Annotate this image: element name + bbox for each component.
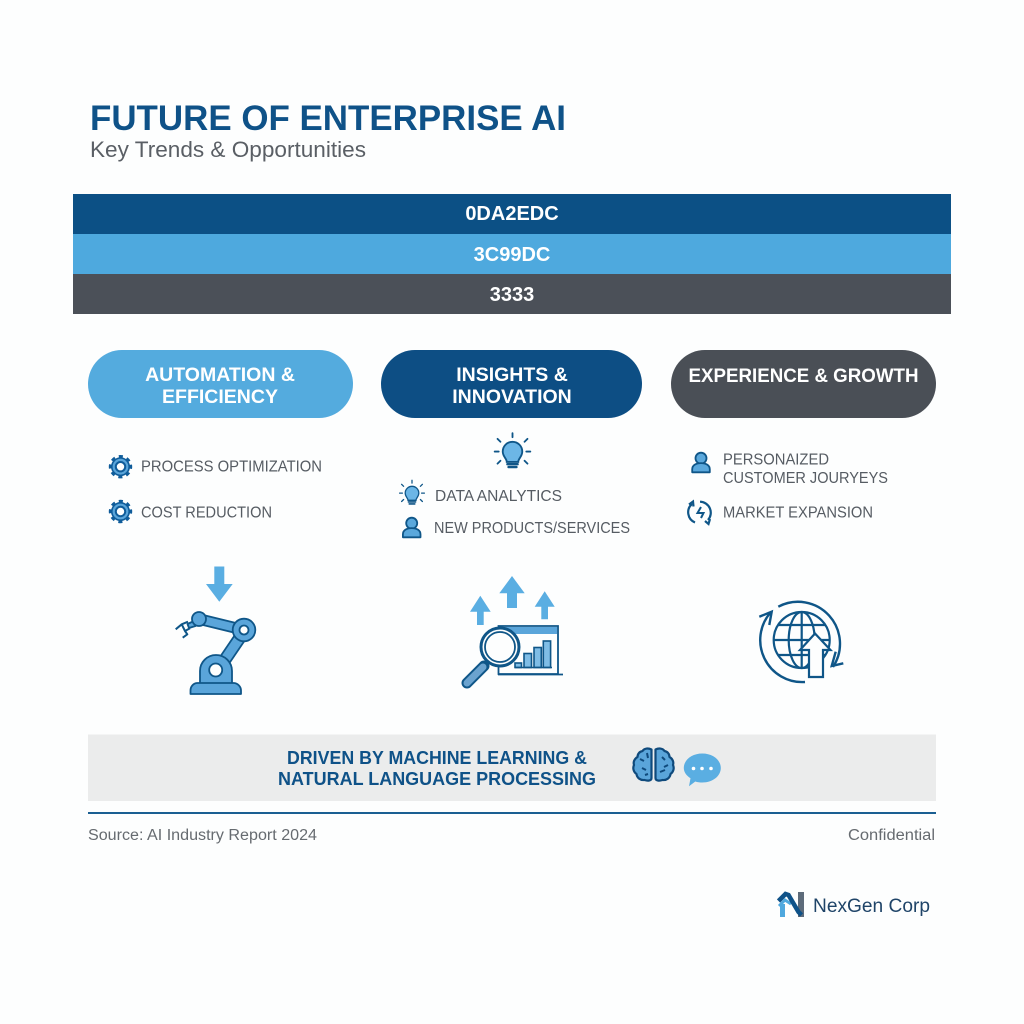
list item: process optimization	[108, 455, 322, 479]
pill heading: insights: INNOVATION	[452, 386, 572, 408]
icon: down arrow	[206, 566, 233, 602]
pill heading: automation: EFFICIENCY	[162, 386, 278, 408]
list item: personalized journeys	[692, 452, 888, 487]
band: 3C99DC	[73, 234, 951, 274]
pill heading: experience: EXPERIENCE & GROWTH	[688, 365, 918, 387]
source note: Source: AI Industry Report 2024	[88, 827, 317, 844]
list item: market expansion	[688, 502, 873, 524]
logo mark	[778, 892, 802, 917]
subtitle: Key Trends & Opportunities	[90, 137, 366, 162]
list item: cost reduction	[108, 499, 272, 524]
list item: data analytics	[400, 480, 562, 505]
panel: automation and efficiency	[88, 350, 353, 694]
list item: personalized journeys: CUSTOMER JOURYEYS	[723, 470, 888, 487]
icon: brain	[633, 749, 674, 781]
list item: data analytics: DATA ANALYTICS	[435, 488, 562, 505]
list item: new products: NEW PRODUCTS/SERVICES	[434, 520, 630, 537]
stacked colour bands	[73, 194, 951, 314]
pill heading: insights	[381, 350, 642, 418]
panel: experience and growth	[671, 350, 936, 682]
band: 3C99DC: 3C99DC	[474, 244, 550, 266]
icon: robot arm	[176, 612, 255, 694]
band: 3333	[73, 274, 951, 314]
icon: speech bubble	[684, 754, 721, 786]
icon: three up arrows	[470, 576, 555, 625]
list item: process optimization: PROCESS OPTIMIZATION	[141, 458, 322, 476]
icon: lightbulb	[495, 433, 530, 467]
icon: globe with growth arrow	[759, 602, 843, 682]
confidential note: Confidential	[848, 827, 935, 844]
banner text: NATURAL LANGUAGE PROCESSING	[278, 768, 596, 789]
list item: market expansion: MARKET EXPANSION	[723, 504, 873, 522]
list item: cost reduction: COST REDUCTION	[141, 504, 272, 522]
footer rule	[88, 812, 936, 814]
banner text	[278, 747, 596, 789]
banner text: DRIVEN BY MACHINE LEARNING &	[287, 747, 587, 768]
pill heading: experience	[671, 350, 936, 418]
logo wordmark: NexGen Corp	[813, 896, 930, 917]
band: 0DA2EDC	[73, 194, 951, 234]
logo: NexGen Corp	[778, 892, 930, 917]
pill heading: insights: INSIGHTS &	[456, 364, 568, 386]
title: FUTURE OF ENTERPRISE AI	[90, 99, 566, 138]
pill heading: automation: AUTOMATION &	[145, 364, 295, 386]
panel: insights and innovation	[381, 350, 642, 683]
pill heading: automation	[88, 350, 353, 418]
driver banner	[88, 734, 936, 801]
list item: personalized journeys: PERSONAIZED	[723, 452, 829, 468]
icon: dashboard and magnifier	[467, 626, 563, 683]
band: 3333: 3333	[490, 284, 534, 306]
band: 0DA2EDC: 0DA2EDC	[465, 203, 559, 225]
